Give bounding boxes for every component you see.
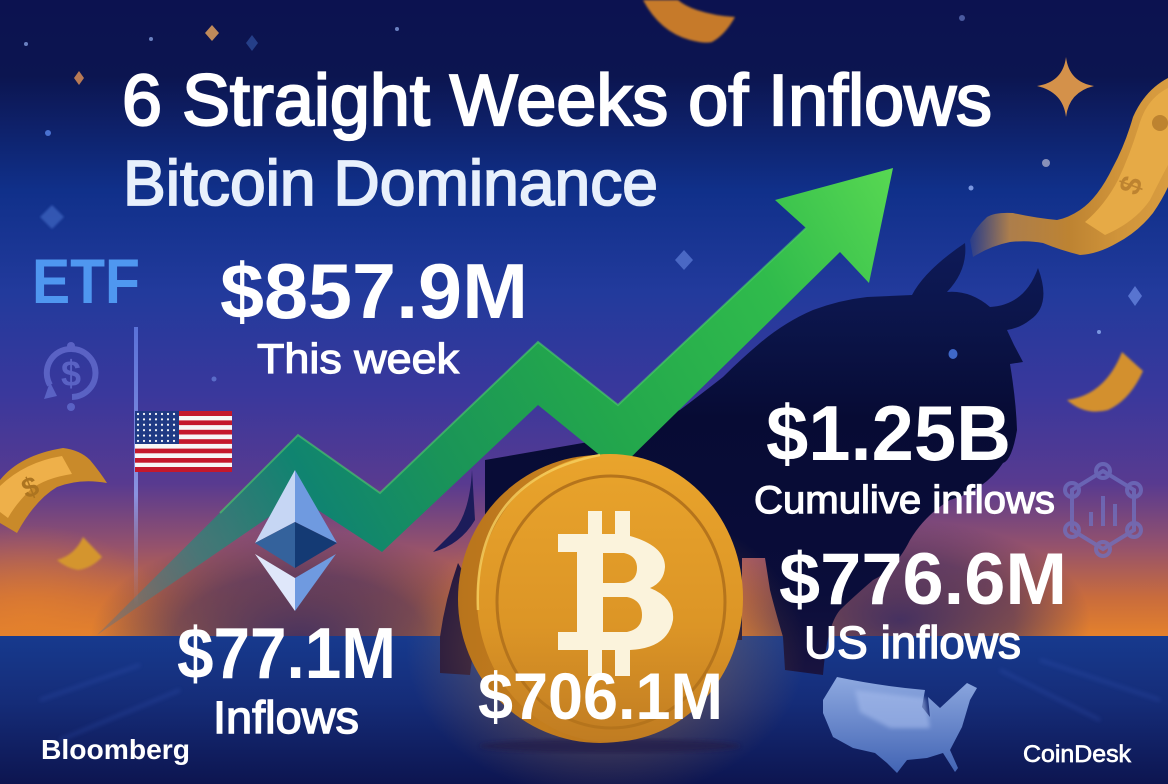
metric: bitcoin inflows: $706.1M [478,659,723,733]
source: CoinDesk: CoinDesk [1023,741,1132,768]
metric: US inflows [779,539,1067,668]
illustration: bull silhouette [433,243,1043,675]
bull eye [948,349,958,359]
icon: US flag [135,411,232,472]
metric: US inflows: US inflows [804,617,1021,668]
source: Bloomberg: Bloomberg [41,734,190,765]
metric: ethereum inflows: Inflows [213,692,359,743]
icon: money ribbon right: $ [1113,172,1150,199]
title: 6 Straight Weeks of Inflows [122,61,992,141]
green arrow [97,168,893,635]
metric: this week: $857.9M [220,247,528,335]
icon: ethereum [255,470,337,611]
bull tail [433,470,475,552]
icon: sparkle star [1037,57,1094,117]
icon: top falling ribbon [643,0,735,43]
metric: cumulative inflows [754,389,1055,522]
metric: ethereum inflows: $77.1M [177,614,396,694]
metric: this week [220,247,528,382]
icon: money ribbon left [0,448,107,533]
background stars [24,15,1142,382]
horizon shading [0,520,1090,750]
subtitle: Bitcoin Dominance [123,147,658,219]
icon: money fragment right [1067,352,1143,412]
icon: network chart [1065,464,1141,556]
coin shadow [480,739,740,753]
icon: ETF label: ETF [32,247,140,317]
floor light rays [40,660,1160,740]
icon: money ribbon left: $ [17,470,44,505]
icon: US map [823,677,977,773]
icon: bitcoin coin [458,454,743,743]
floor [0,636,1168,784]
metric: this week: This week [257,335,460,382]
flag pole [134,327,138,607]
coin glow [406,500,806,784]
icon: dollar cycle: $ [61,353,81,394]
metric: ethereum inflows [177,614,396,743]
bull rear leg [440,563,480,675]
metric: cumulative inflows: $1.25B [766,389,1011,477]
metric: cumulative inflows: Cumulive inflows [754,479,1055,522]
icon: dollar cycle [44,342,95,411]
icon: money ribbon right [970,78,1168,257]
icon: money fragment left [57,537,102,570]
metric: US inflows: $776.6M [779,539,1067,620]
